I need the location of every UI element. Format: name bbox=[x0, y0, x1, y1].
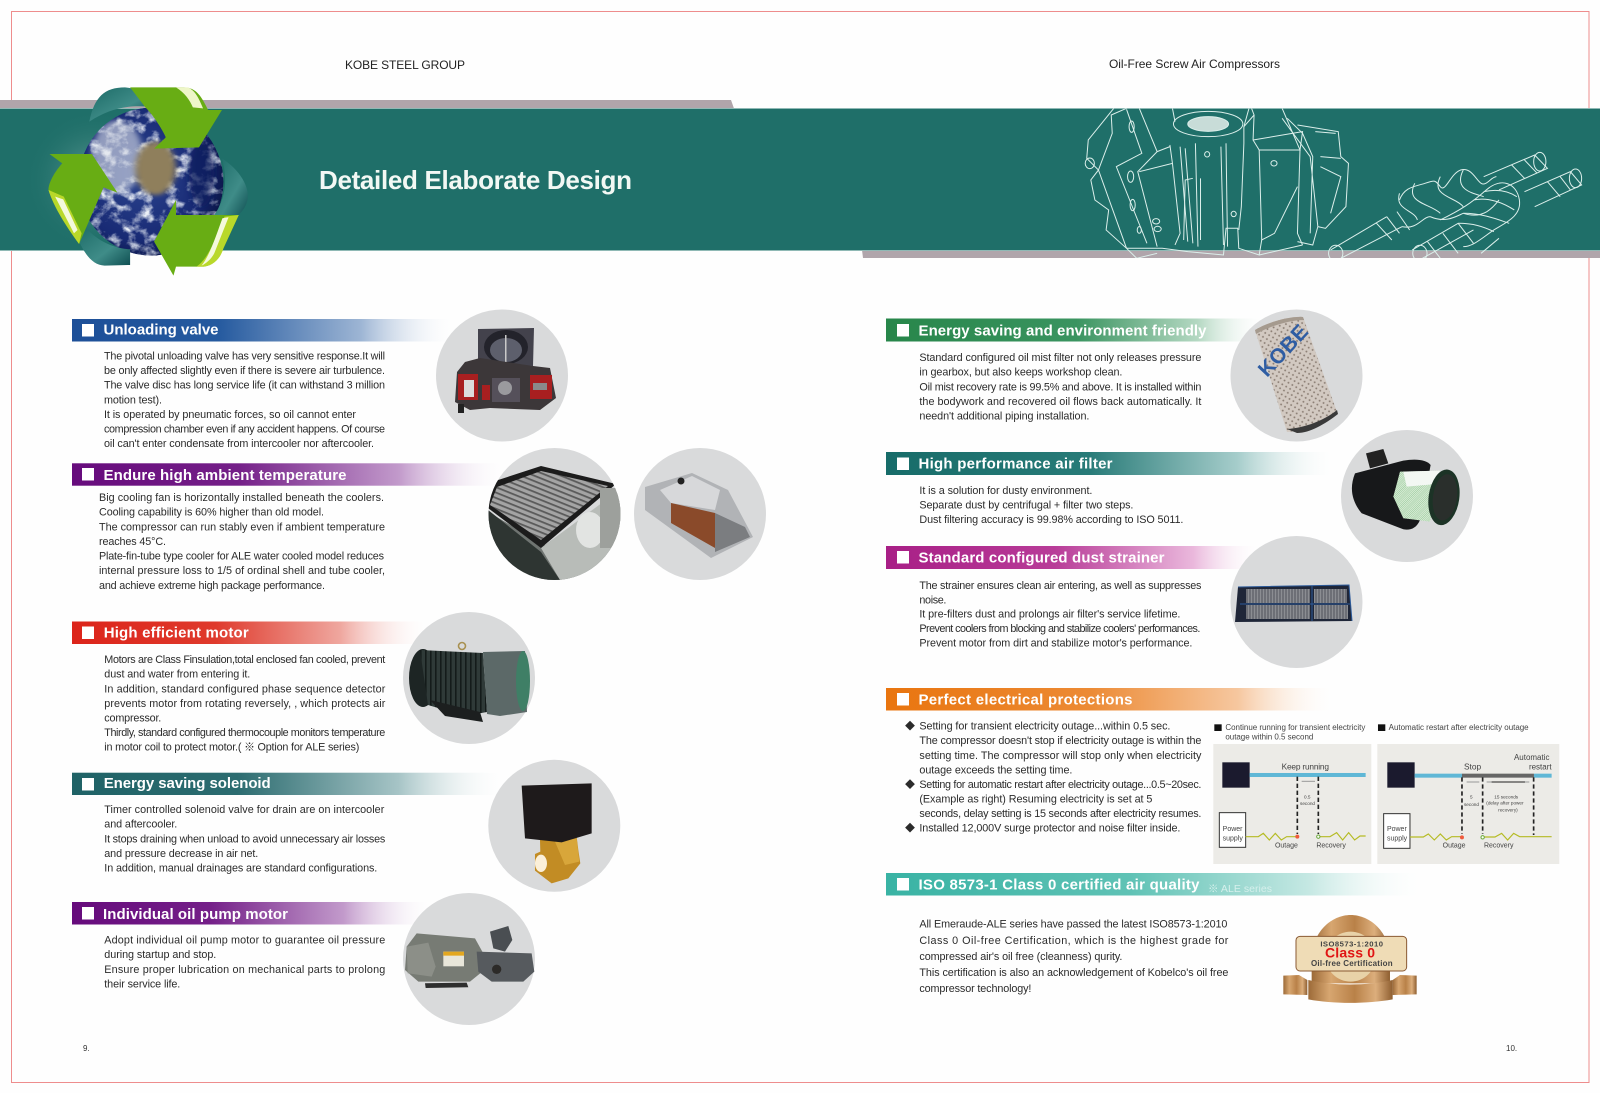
body text: seconds, delay setting is 15 seconds after electricity resumes. bbox=[919, 808, 1201, 820]
body text: It is a solution for dusty environment. bbox=[919, 485, 1092, 497]
chart: continue running diagram: Continue running for transient electricity bbox=[1225, 723, 1365, 732]
icon: earth with recycling arrows bbox=[48, 87, 248, 276]
page number 10: 10. bbox=[1506, 1044, 1517, 1053]
chart: continue running diagram: Outage bbox=[1275, 842, 1298, 849]
panel: Energy saving solenoid bbox=[72, 760, 620, 892]
heading bar: Energy saving and environment friendly bbox=[918, 322, 1207, 340]
body text: compressor technology! bbox=[919, 983, 1031, 995]
body text: Plate-fin-tube type cooler for ALE water cooled model reduces bbox=[99, 550, 385, 562]
header text: KOBE STEEL GROUP: KOBE STEEL GROUP bbox=[345, 58, 465, 72]
chart: automatic restart diagram: restart bbox=[1529, 762, 1552, 771]
body text: Ensure proper lubrication on mechanical parts to prolong bbox=[104, 964, 385, 976]
body text: the bodywork and recovered oil flows back automatically. It bbox=[919, 396, 1201, 408]
body text: The compressor doesn't stop if electricity outage is within the bbox=[919, 735, 1201, 747]
chart: continue running diagram bbox=[1213, 723, 1371, 864]
chart: continue running diagram: outage within 0.5 second bbox=[1225, 733, 1313, 742]
page number 9: 9. bbox=[83, 1044, 90, 1053]
body text: ◆ bbox=[905, 779, 915, 791]
body text: setting time. The compressor will stop only when electricity bbox=[919, 750, 1202, 762]
body text: All Emeraude-ALE series have passed the latest ISO8573-1:2010 bbox=[919, 918, 1227, 930]
heading bar: Perfect electrical protections bbox=[918, 692, 1132, 708]
body text: be only affected slightly even if there is severe air turbulence. bbox=[104, 365, 385, 377]
body text: In addition, manual drainages are standard configurations. bbox=[104, 862, 377, 874]
heading bar bbox=[72, 773, 507, 795]
heading bar: Standard configured dust strainer bbox=[918, 550, 1165, 566]
body text: The valve disc has long service life (it can withstand 3 million bbox=[104, 380, 385, 392]
body text: Prevent coolers from blocking and stabilize coolers' performances. bbox=[919, 623, 1200, 635]
heading bar bbox=[72, 902, 434, 924]
icon: compressor line drawing bbox=[1085, 108, 1582, 261]
panel: ISO 8573-1 Class 0 certified air quality bbox=[886, 873, 1428, 1003]
body text: Class 0 Oil-free Certification, which is the highest grade for bbox=[919, 935, 1229, 947]
chart: continue running diagram: 0.5 bbox=[1304, 794, 1311, 799]
chart: continue running diagram: supply bbox=[1223, 836, 1243, 843]
heading bar bbox=[886, 546, 1261, 569]
panel: Unloading valve bbox=[72, 310, 568, 450]
top arrow bbox=[130, 87, 222, 149]
body text bbox=[99, 492, 385, 592]
body text: prevents motor from rotating reversely, , which protects air bbox=[104, 698, 386, 710]
chart: automatic restart diagram: Recovery bbox=[1484, 842, 1514, 849]
bottom arrow bbox=[154, 200, 239, 276]
header text: Oil-Free Screw Air Compressors: Oil-Free Screw Air Compressors bbox=[1109, 57, 1280, 71]
heading bar bbox=[886, 873, 1428, 896]
left arrow bbox=[48, 154, 117, 244]
body text: Separate dust by centrifugal + filter two steps. bbox=[919, 500, 1133, 512]
chart: automatic restart diagram: Automatic bbox=[1514, 753, 1549, 762]
body text: compressed air's oil free (cleanness) qurity. bbox=[919, 951, 1122, 963]
body text bbox=[919, 352, 1201, 422]
body text bbox=[104, 934, 385, 990]
body text: Big cooling fan is horizontally installed beneath the coolers. bbox=[99, 492, 384, 504]
badge: Class 0 Oil-free Certification: ISO8573-1:2010 bbox=[1320, 939, 1383, 948]
heading bar bbox=[886, 688, 1337, 710]
badge: Class 0 Oil-free Certification: Class 0 bbox=[1325, 945, 1375, 961]
chart: continue running diagram: Power bbox=[1223, 826, 1243, 833]
photo: oil pump motor bbox=[403, 893, 535, 1025]
body text: their service life. bbox=[104, 978, 180, 990]
body text: oil can't enter condensate from intercooler nor aftercooler. bbox=[104, 438, 374, 450]
body text bbox=[919, 918, 1229, 995]
body text bbox=[905, 720, 1202, 834]
body text: The compressor can run stably even if ambient temperature bbox=[99, 521, 385, 533]
heading bar: ISO 8573-1 Class 0 certified air quality bbox=[918, 876, 1200, 894]
heading bar: Energy saving solenoid bbox=[104, 775, 271, 792]
body text: in motor coil to protect motor.( ※ Option for ALE series) bbox=[104, 742, 359, 754]
body text: reaches 45°C. bbox=[99, 536, 166, 548]
body text: dust and water from entering it. bbox=[104, 669, 250, 681]
body text: outage exceeds the setting time. bbox=[919, 764, 1072, 776]
photo: unloading valve bbox=[436, 310, 568, 442]
heading bar: High performance air filter bbox=[918, 456, 1113, 472]
heading bar: High efficient motor bbox=[104, 624, 249, 642]
body text bbox=[919, 580, 1202, 650]
chart: automatic restart diagram: Outage bbox=[1443, 842, 1466, 849]
body text: and pressure decrease in air net. bbox=[104, 848, 258, 860]
body text: The pivotal unloading valve has very sensitive response.It will bbox=[104, 350, 385, 362]
badge: Class 0 Oil-free Certification bbox=[1283, 915, 1417, 1003]
body text: in gearbox, but also keeps workshop clean. bbox=[919, 367, 1122, 379]
chart: automatic restart diagram: supply bbox=[1387, 836, 1408, 843]
body text: Setting for automatic restart after electricity outage...0.5~20sec. bbox=[919, 779, 1201, 791]
chart: automatic restart diagram: 5 bbox=[1470, 795, 1473, 800]
photo: motor bbox=[403, 612, 535, 744]
body text: It stops draining when unload to avoid unnecessary air losses bbox=[104, 833, 386, 845]
heading bar bbox=[886, 318, 1266, 342]
chart: automatic restart diagram: 15 seconds bbox=[1494, 794, 1519, 799]
body text: and achieve extreme high package performance. bbox=[99, 580, 325, 592]
body text: motion test). bbox=[104, 394, 162, 406]
teal ribbons bbox=[78, 87, 248, 266]
chart: automatic restart diagram: second bbox=[1464, 802, 1479, 807]
body text: ◆ bbox=[905, 720, 915, 732]
chart: automatic restart diagram: Power bbox=[1387, 826, 1407, 833]
body text: and aftercooler. bbox=[104, 819, 177, 831]
panel: Endure high ambient temperature bbox=[72, 448, 766, 592]
photo: air filter bbox=[1341, 430, 1473, 562]
chart: automatic restart diagram: Automatic restart after electricity outage bbox=[1389, 723, 1529, 732]
heading bar bbox=[72, 319, 457, 342]
heading bar: Endure high ambient temperature bbox=[104, 467, 346, 484]
chart: automatic restart diagram: recovery) bbox=[1498, 807, 1518, 812]
title banner bbox=[0, 100, 1600, 258]
body text: Prevent motor from dirt and stabilize motor's performance. bbox=[919, 638, 1192, 650]
body text bbox=[104, 654, 386, 754]
heading bar: ※ ALE series bbox=[1208, 883, 1272, 895]
body text: The strainer ensures clean air entering, as well as suppresses bbox=[919, 580, 1202, 592]
body text: It pre-filters dust and prolongs air filter's service lifetime. bbox=[919, 608, 1180, 620]
body text: It is operated by pneumatic forces, so oil cannot enter bbox=[104, 409, 356, 421]
photo: air cooler bbox=[484, 448, 622, 580]
panel: Energy saving and environment friendly bbox=[886, 310, 1362, 442]
body text: Standard configured oil mist filter not only releases pressure bbox=[919, 352, 1201, 364]
heading bar: Unloading valve bbox=[104, 322, 218, 338]
photo: oil mist filter bbox=[1230, 310, 1362, 442]
body text: In addition, standard configured phase sequence detector bbox=[104, 683, 386, 695]
chart: automatic restart diagram bbox=[1377, 723, 1559, 864]
panel: Standard configured dust strainer bbox=[886, 536, 1362, 668]
panel: High efficient motor bbox=[72, 612, 535, 754]
body text bbox=[919, 485, 1183, 526]
body text bbox=[104, 350, 385, 450]
panel: Individual oil pump motor bbox=[72, 893, 535, 1025]
body text: Cooling capability is 60% higher than old model. bbox=[99, 507, 324, 519]
chart: automatic restart diagram: (delay after power bbox=[1486, 801, 1524, 806]
body text: (Example as right) Resuming electricity is set at 5 bbox=[919, 794, 1152, 806]
heading bar bbox=[72, 463, 508, 486]
body text: compression chamber even if any accident happens. Of course bbox=[104, 424, 385, 436]
body text: Motors are Class Finsulation,total enclosed fan cooled, prevent bbox=[104, 654, 385, 666]
body text bbox=[104, 804, 386, 874]
chart: automatic restart diagram: Stop bbox=[1464, 762, 1481, 772]
panel: High performance air filter bbox=[886, 430, 1473, 562]
panel: Perfect electrical protections bbox=[886, 688, 1559, 864]
body text: Installed 12,000V surge protector and noise filter inside. bbox=[919, 822, 1180, 834]
title: Detailed Elaborate Design bbox=[319, 165, 632, 195]
body text: internal pressure loss to 1/5 of ordinal shell and tube cooler, bbox=[99, 565, 385, 577]
body text: during startup and stop. bbox=[104, 949, 216, 961]
body text: compressor. bbox=[104, 713, 161, 725]
heading bar bbox=[72, 622, 430, 644]
chart: continue running diagram: second bbox=[1300, 801, 1315, 806]
body text: This certification is also an acknowledgement of Kobelco's oil free bbox=[919, 967, 1228, 979]
photo: solenoid valve bbox=[488, 760, 620, 892]
body text: Thirdly, standard configured thermocouple monitors temperature bbox=[104, 727, 385, 739]
body text: Setting for transient electricity outage...within 0.5 sec. bbox=[919, 720, 1170, 732]
photo: oil mist filter: KOBE bbox=[1254, 320, 1313, 381]
photo: dust strainer bbox=[1230, 536, 1362, 668]
body text: needn't additional piping installation. bbox=[919, 410, 1089, 422]
chart: continue running diagram: Recovery bbox=[1316, 842, 1346, 849]
body text: Oil mist recovery rate is 99.5% and above. It is installed within bbox=[919, 381, 1201, 393]
body text: Adopt individual oil pump motor to guarantee oil pressure bbox=[104, 934, 385, 946]
body text: ◆ bbox=[905, 822, 915, 834]
chart: continue running diagram: Keep running bbox=[1282, 762, 1329, 772]
heading bar: Individual oil pump motor bbox=[103, 906, 288, 923]
heading bar bbox=[886, 452, 1337, 475]
photo: plate-fin cooler bbox=[634, 448, 766, 580]
body text: Dust filtering accuracy is 99.98% according to ISO 5011. bbox=[919, 514, 1183, 526]
body text: Timer controlled solenoid valve for drain are on intercooler bbox=[104, 804, 385, 816]
badge: Class 0 Oil-free Certification: Oil-free Certification bbox=[1311, 959, 1393, 968]
earth globe bbox=[77, 107, 227, 257]
body text: noise. bbox=[919, 594, 946, 606]
